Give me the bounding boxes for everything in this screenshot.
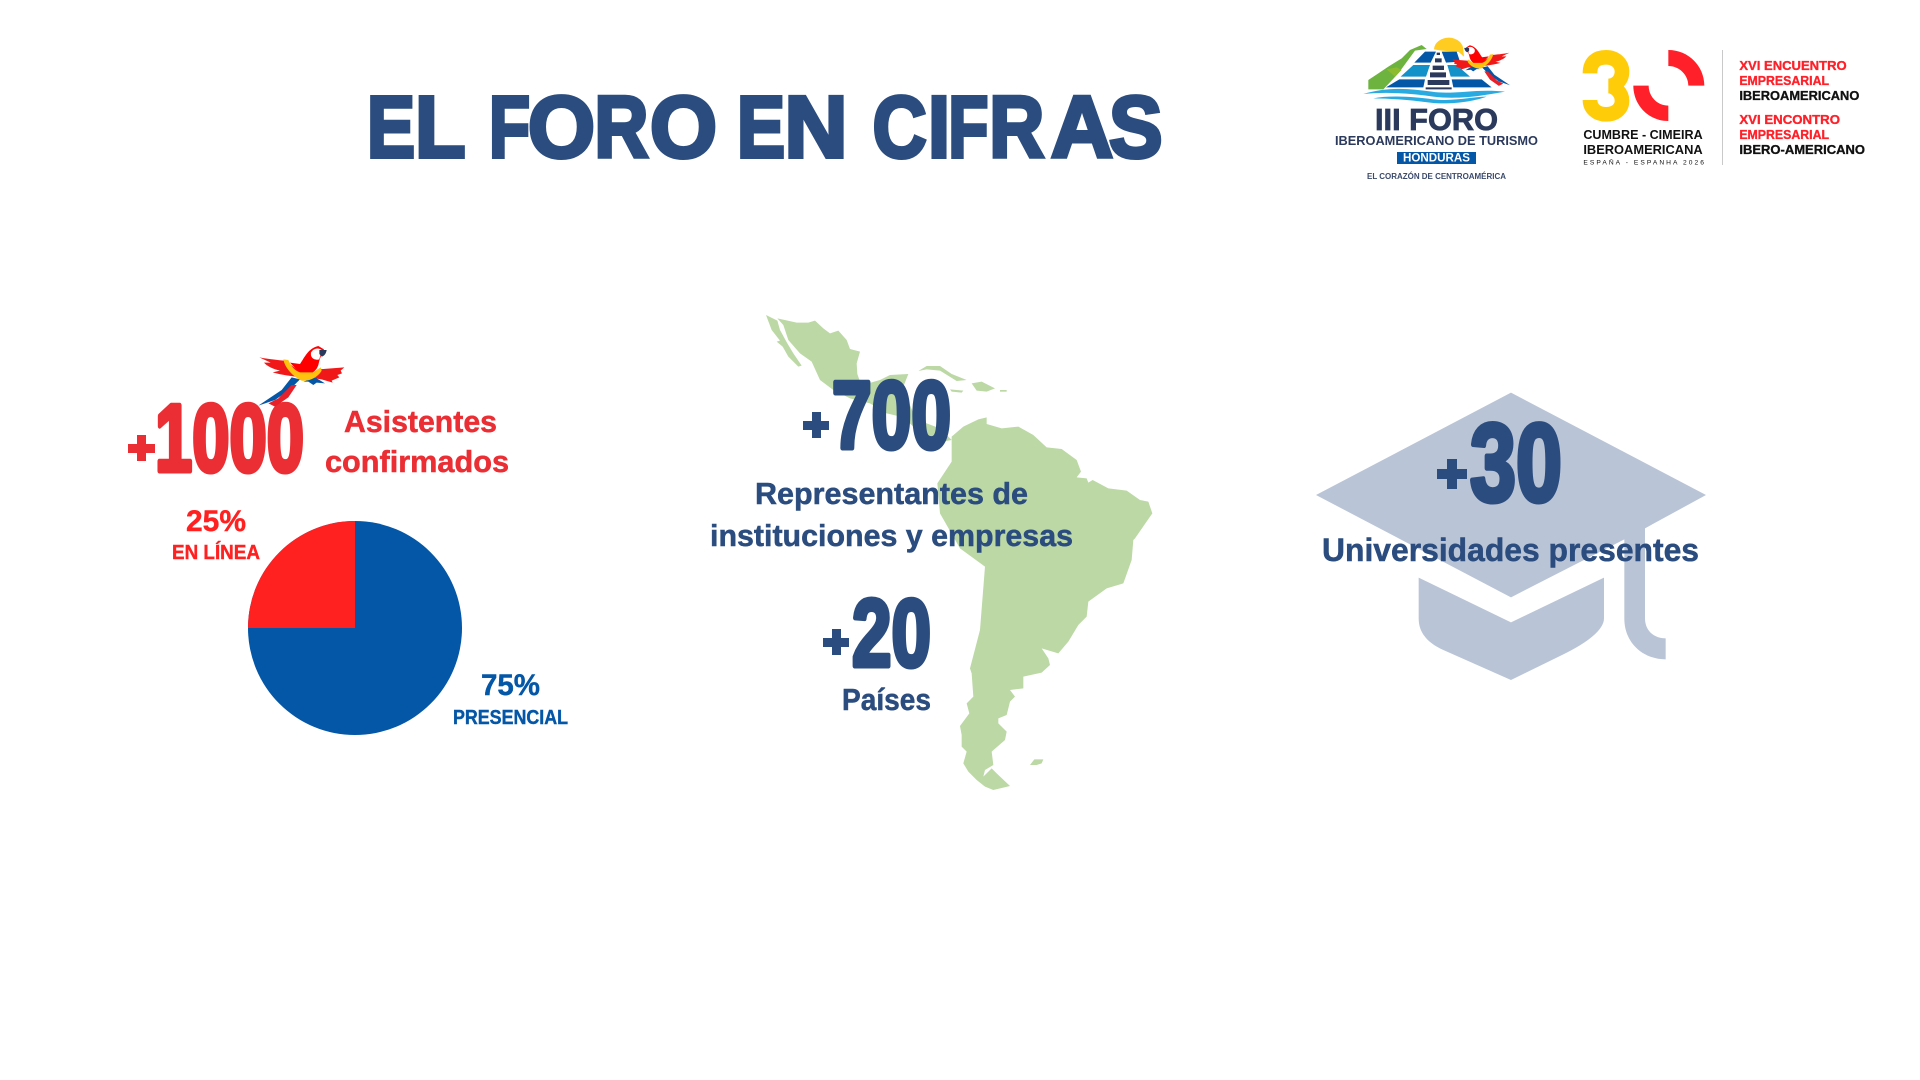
label: 75% in person: [453, 669, 568, 729]
icon: macaw: [258, 346, 344, 407]
label: 25% online: [172, 505, 260, 564]
summit name: IBEROAMERICANA: [1583, 142, 1703, 157]
title: C: [873, 79, 927, 176]
numeral 3: [1590, 57, 1622, 114]
stat: +20: [823, 580, 931, 687]
stat: +700: 700: [832, 362, 951, 469]
label: 75% in person: 75%: [481, 669, 540, 702]
icon: graduation cap: [1316, 393, 1706, 680]
title: I: [928, 79, 950, 176]
title: N: [784, 79, 848, 176]
stat: +1000: [128, 385, 304, 492]
title: R: [594, 79, 648, 176]
logo artwork: pyramid, sun and water: [1363, 38, 1505, 103]
label: 75% in person: PRESENCIAL: [453, 707, 568, 729]
logo macaw: [1452, 45, 1510, 86]
title: A: [1051, 79, 1113, 176]
stat: +700: [803, 362, 951, 469]
panel: universities: [1316, 393, 1706, 680]
title: L: [415, 79, 464, 176]
encuentro text: XVI ENCUENTRO: [1739, 58, 1847, 73]
title: O: [528, 79, 595, 176]
encuentro text: IBERO-AMERICANO: [1739, 142, 1865, 157]
panel: attendees: [128, 346, 568, 735]
title: E: [737, 79, 785, 176]
label: 25% online: EN LÍNEA: [172, 541, 260, 564]
attendees label: [325, 404, 509, 479]
map: Latin America: [766, 315, 1152, 790]
summit name: ESPAÑA - ESPANHA 2026: [1583, 158, 1704, 167]
label: countries: Países: [842, 682, 931, 717]
attendees label: Asistentes: [344, 404, 497, 439]
label: representatives: instituciones y empresas: [710, 518, 1073, 553]
numeral 0 arcs: [1633, 50, 1704, 121]
title: R: [989, 79, 1044, 176]
stat: +1000: 1000: [155, 385, 304, 492]
logo heading: III FORO: [1375, 102, 1498, 137]
encuentro text: EMPRESARIAL: [1739, 127, 1829, 142]
stat: +30: 30: [1470, 402, 1562, 525]
summit name: [1583, 127, 1704, 167]
title: E: [367, 79, 415, 176]
label: representatives: [710, 476, 1073, 553]
encuentro text: [1739, 58, 1865, 157]
stat: +20: 20: [852, 580, 931, 687]
logo tagline: EL CORAZÓN DE CENTROAMÉRICA: [1367, 172, 1506, 181]
label: representatives: Representantes de: [755, 476, 1028, 511]
title: O: [650, 79, 717, 176]
attendees label: confirmados: [325, 444, 509, 479]
logo: 30 Cumbre Iberoamericana: [1583, 50, 1865, 167]
logo: III Foro Iberoamericano de Turismo: [1335, 38, 1538, 181]
pie chart: 75% / 25%: [248, 521, 462, 735]
label: universities: Universidades presentes: [1322, 532, 1699, 568]
title: S: [1109, 79, 1162, 176]
encuentro text: EMPRESARIAL: [1739, 73, 1829, 88]
title: F: [948, 79, 988, 176]
summit name: CUMBRE - CIMEIRA: [1583, 127, 1703, 142]
logo subheading: IBEROAMERICANO DE TURISMO: [1335, 133, 1538, 148]
title: F: [489, 79, 530, 176]
encuentro text: XVI ENCONTRO: [1739, 112, 1840, 127]
logo badge: Honduras: HONDURAS: [1403, 152, 1470, 164]
stat: +30: [1437, 402, 1562, 525]
encuentro text: IBEROAMERICANO: [1739, 88, 1859, 103]
panel: Latin America: [710, 315, 1152, 790]
label: 25% online: 25%: [186, 505, 246, 538]
